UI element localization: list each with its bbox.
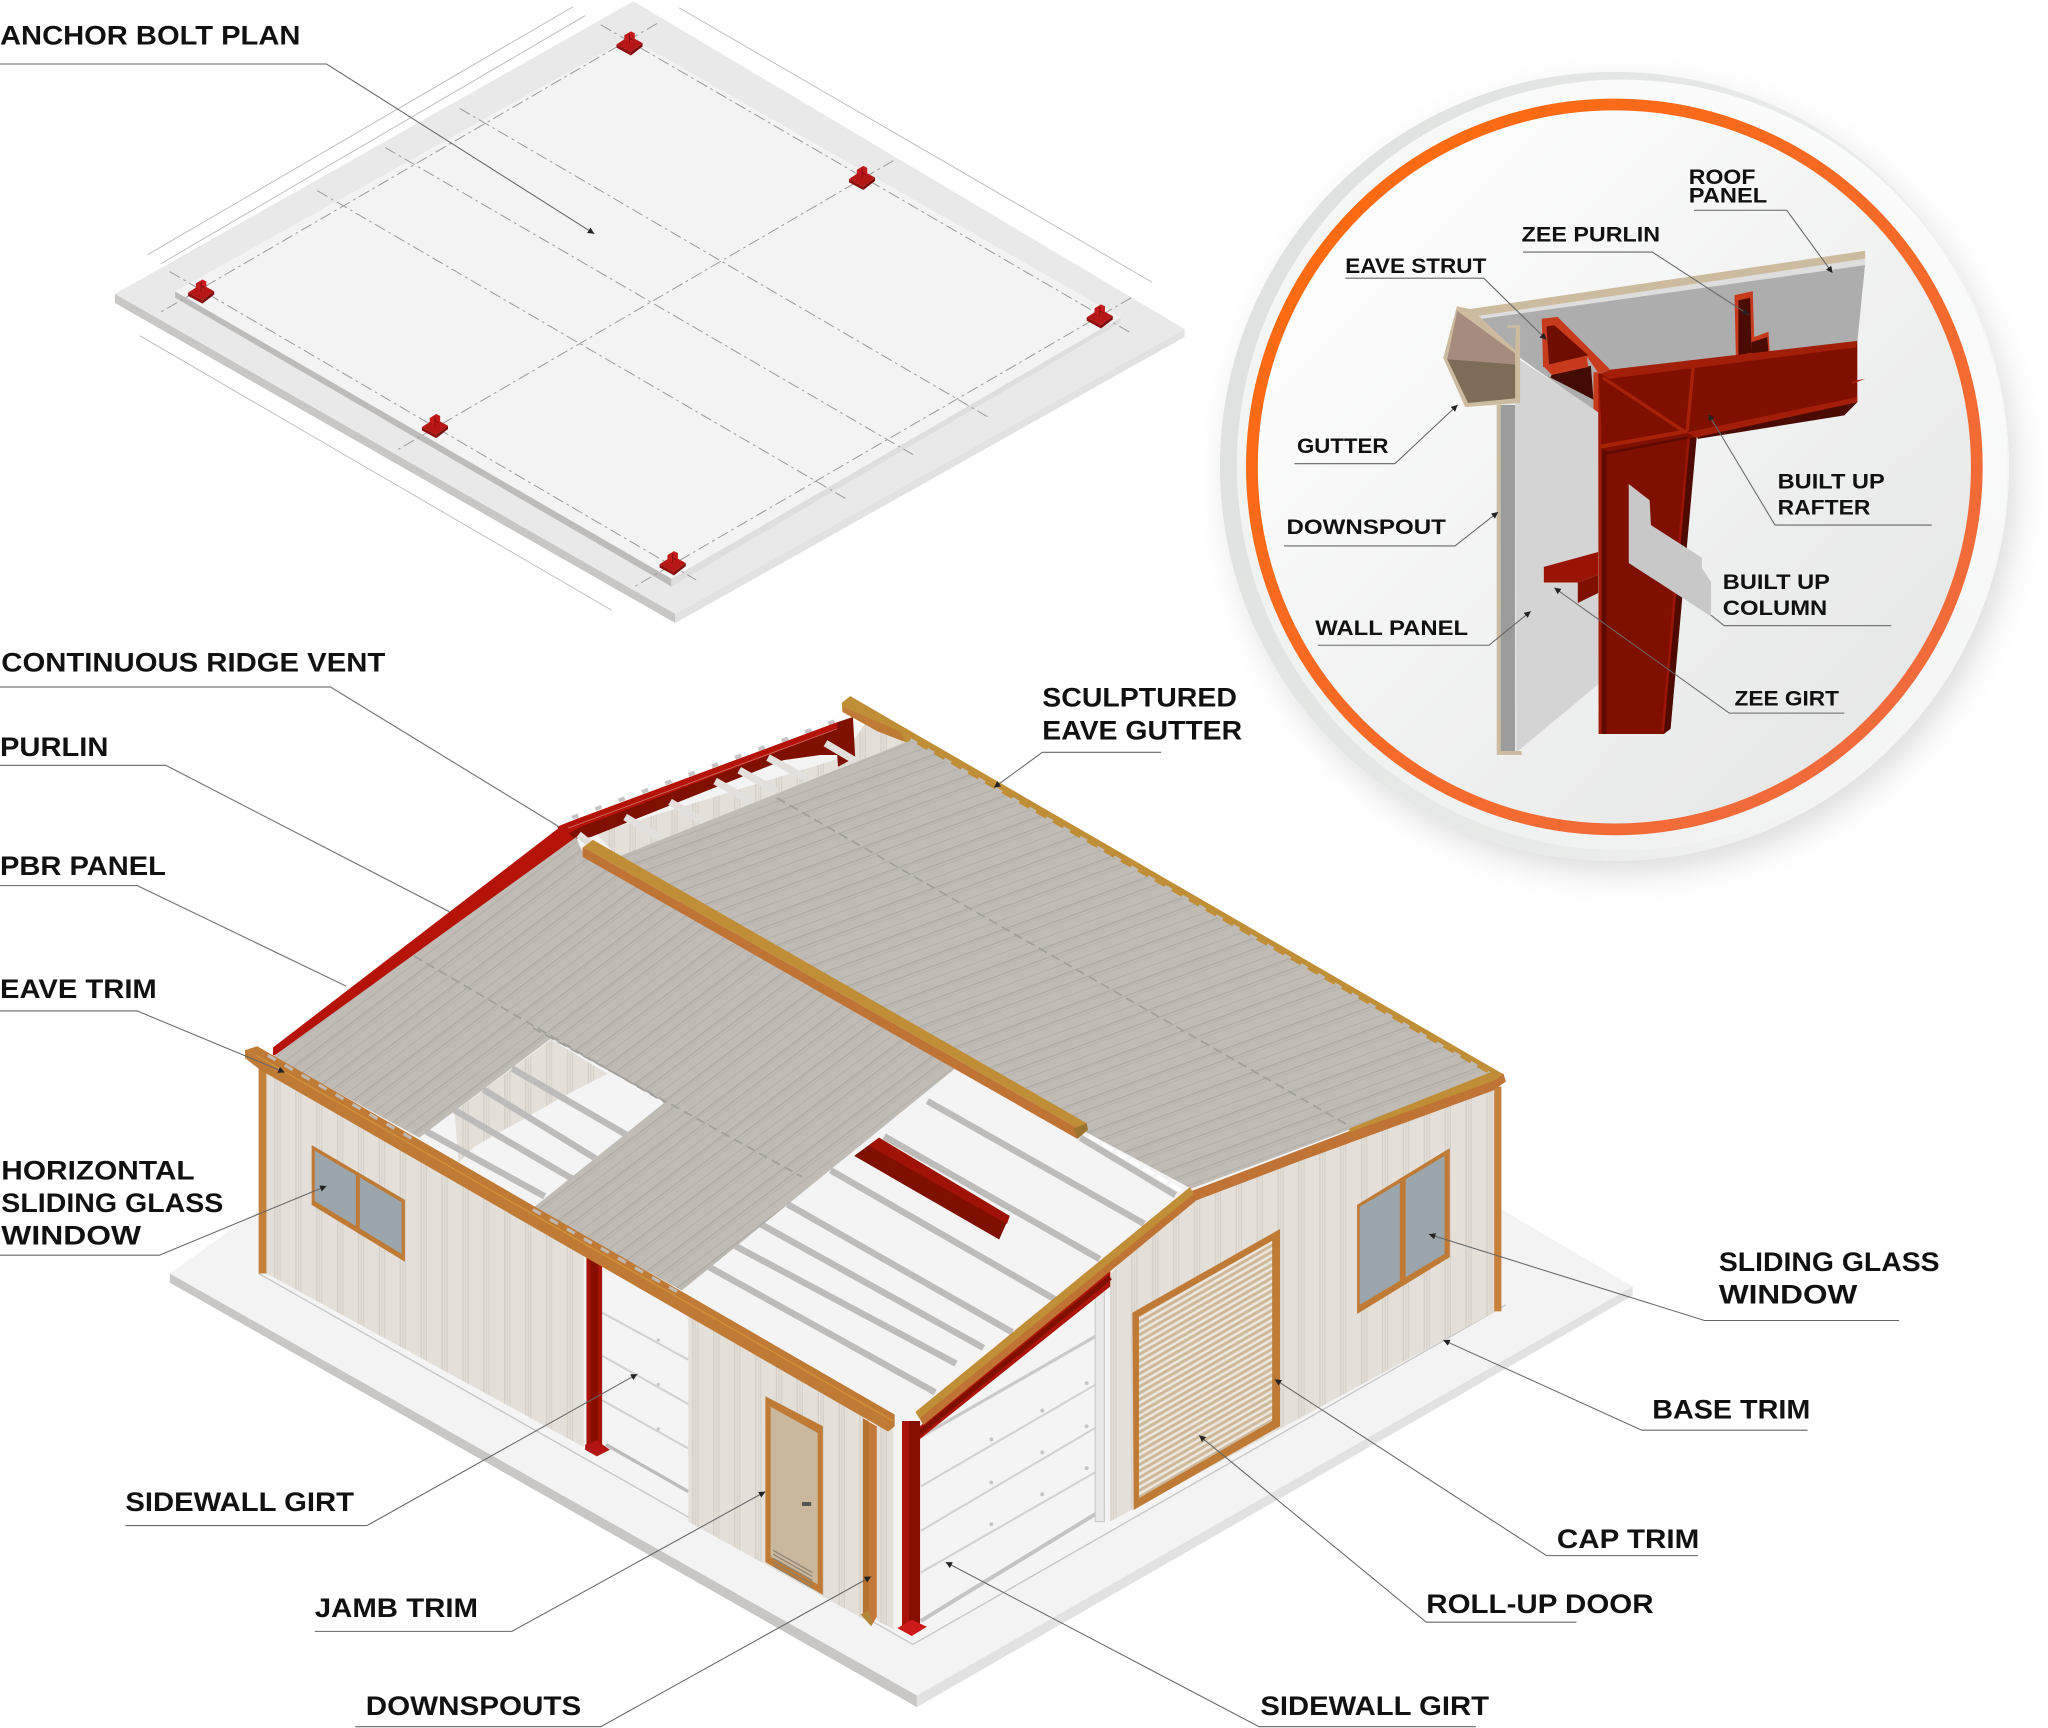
- orange ring: [1252, 104, 1977, 829]
- right roof lower edge: [1089, 1136, 1182, 1191]
- ridge vent scallops: [572, 718, 842, 818]
- label: sidewall girt left: SIDEWALL GIRT: [125, 1487, 355, 1517]
- label: built up column: [1711, 569, 1891, 626]
- label: horizontal sliding glass window: WINDOW: [1, 1221, 142, 1251]
- label: pbr panel: [0, 851, 346, 986]
- circle labels: [1284, 164, 1932, 713]
- label: built up column: BUILT UP: [1723, 569, 1830, 594]
- label: cap trim: [1275, 1379, 1699, 1556]
- circle background: [1220, 72, 2009, 861]
- dimension lines: [140, 7, 1152, 610]
- label: roll-up door: ROLL-UP DOOR: [1426, 1589, 1654, 1619]
- wall seen through opening: [455, 1040, 607, 1162]
- wall post: [1095, 1287, 1104, 1522]
- label: horizontal sliding glass window: HORIZONTAL: [1, 1155, 195, 1185]
- label: jamb trim: JAMB TRIM: [315, 1593, 478, 1623]
- door handle: [802, 1502, 811, 1506]
- interior floor: [259, 718, 1502, 1644]
- label: sliding glass window: [1429, 1234, 1940, 1320]
- downspout: [1497, 405, 1522, 755]
- label: anchor bolt plan: [0, 20, 594, 234]
- label: downspouts: DOWNSPOUTS: [366, 1691, 581, 1721]
- label: zee girt: ZEE GIRT: [1735, 685, 1839, 710]
- eave scalloped edge: [268, 1055, 419, 1143]
- zee girt: [1544, 552, 1598, 603]
- gable rake trim: [916, 1072, 1506, 1425]
- label: base trim: BASE TRIM: [1652, 1394, 1810, 1424]
- roll-up door: [1132, 1229, 1280, 1510]
- label: downspout: DOWNSPOUT: [1287, 514, 1446, 539]
- label: purlin: PURLIN: [0, 732, 108, 762]
- girts left bay: [602, 1313, 688, 1492]
- label: built up rafter: [1708, 414, 1932, 525]
- left window: [312, 1145, 405, 1262]
- gutter: [1443, 306, 1520, 407]
- door vent: [773, 1550, 812, 1588]
- label: zee girt: [1554, 588, 1844, 713]
- built up column: [1598, 374, 1697, 734]
- circle light rim: [1237, 80, 2008, 850]
- right roof panel: [618, 739, 1493, 1191]
- label: built up rafter: RAFTER: [1778, 495, 1871, 520]
- label: sidewall girt right: [946, 1562, 1490, 1727]
- wall panel: [1515, 357, 1601, 752]
- front eave trim: [245, 1046, 895, 1432]
- anchor bolt plan diagram: [115, 1, 1185, 623]
- front girts: [921, 1336, 1096, 1621]
- right window: [1357, 1148, 1450, 1314]
- label: anchor bolt plan: ANCHOR BOLT PLAN: [0, 20, 300, 50]
- label: built up column: COLUMN: [1723, 595, 1827, 620]
- label: wall panel: [1315, 611, 1531, 645]
- label: built up rafter: BUILT UP: [1778, 468, 1885, 493]
- label: wall panel: WALL PANEL: [1315, 615, 1468, 640]
- label: pbr panel: PBR PANEL: [0, 851, 166, 881]
- eave strut: [1542, 317, 1610, 413]
- left roof seam: [414, 956, 665, 1102]
- label: roof panel: PANEL: [1689, 182, 1767, 207]
- back rafter: [273, 717, 855, 1055]
- label: sidewall girt right: SIDEWALL GIRT: [1260, 1691, 1490, 1721]
- label: jamb trim: [315, 1492, 765, 1631]
- roof purlins: [426, 1068, 1176, 1392]
- anchor grid lines: [161, 24, 1131, 586]
- label: gutter: GUTTER: [1297, 433, 1389, 458]
- door: [765, 1396, 823, 1595]
- label: eave trim: [0, 974, 285, 1072]
- left red column: [585, 1258, 610, 1456]
- front left wall: [266, 1068, 584, 1447]
- zee purlin: [1735, 291, 1770, 357]
- detail circle: [1220, 72, 2009, 861]
- label: downspouts: [355, 1576, 871, 1727]
- ridge cap: [583, 840, 1088, 1139]
- back purlins: [579, 743, 856, 845]
- corner wall strip: [877, 1421, 893, 1629]
- label: continuous ridge vent: [0, 647, 559, 827]
- label: sliding glass window: WINDOW: [1719, 1280, 1858, 1310]
- label: eave strut: EAVE STRUT: [1345, 253, 1486, 278]
- red purlin beam: [854, 1138, 1010, 1240]
- gutter back eave: [842, 696, 1505, 1079]
- base line: [259, 1273, 1506, 1644]
- downspout: [861, 1418, 877, 1626]
- label: gutter: [1294, 405, 1458, 464]
- concrete slab: [115, 1, 1185, 623]
- back wall: [596, 718, 910, 857]
- circle inner disc: [1253, 105, 1976, 829]
- right roof scalloped edge: [910, 739, 1493, 1075]
- column panel cut: [1629, 484, 1711, 616]
- label: sculptured eave gutter: EAVE GUTTER: [1042, 715, 1242, 745]
- label: sculptured eave gutter: [994, 683, 1242, 788]
- front door-side wall: [688, 1313, 865, 1620]
- label: eave strut: [1345, 253, 1546, 340]
- label: sculptured eave gutter: SCULPTURED: [1042, 683, 1237, 713]
- label: purlin: [0, 732, 449, 912]
- floor slab: [170, 1045, 1633, 1707]
- label: roof panel: [1689, 164, 1832, 273]
- right roof seam: [777, 798, 1349, 1126]
- right red column: [897, 1267, 1110, 1636]
- label: sliding glass window: SLIDING GLASS: [1719, 1247, 1940, 1277]
- left roof panel: [273, 837, 960, 1290]
- label: horizontal sliding glass window: SLIDING GLASS: [1, 1188, 223, 1218]
- anchor bolts: [188, 31, 1113, 575]
- label: roof panel: ROOF: [1689, 164, 1755, 189]
- built up rafter: [1599, 341, 1865, 453]
- roof panel: [1467, 251, 1865, 413]
- label: roll-up door: [1199, 1435, 1654, 1622]
- label: zee purlin: [1522, 222, 1749, 315]
- label: eave trim: EAVE TRIM: [0, 974, 157, 1004]
- building: [170, 696, 1633, 1707]
- label: sidewall girt left: [125, 1374, 637, 1526]
- right end wall: [1110, 1087, 1496, 1522]
- label: downspout: [1284, 512, 1498, 546]
- label: cap trim: CAP TRIM: [1557, 1524, 1699, 1554]
- corner trims: [259, 1064, 1501, 1311]
- label: continuous ridge vent: CONTINUOUS RIDGE VENT: [1, 647, 386, 677]
- label: base trim: [1443, 1340, 1810, 1430]
- label: zee purlin: ZEE PURLIN: [1522, 222, 1660, 247]
- label: horizontal sliding glass window: [0, 1155, 327, 1255]
